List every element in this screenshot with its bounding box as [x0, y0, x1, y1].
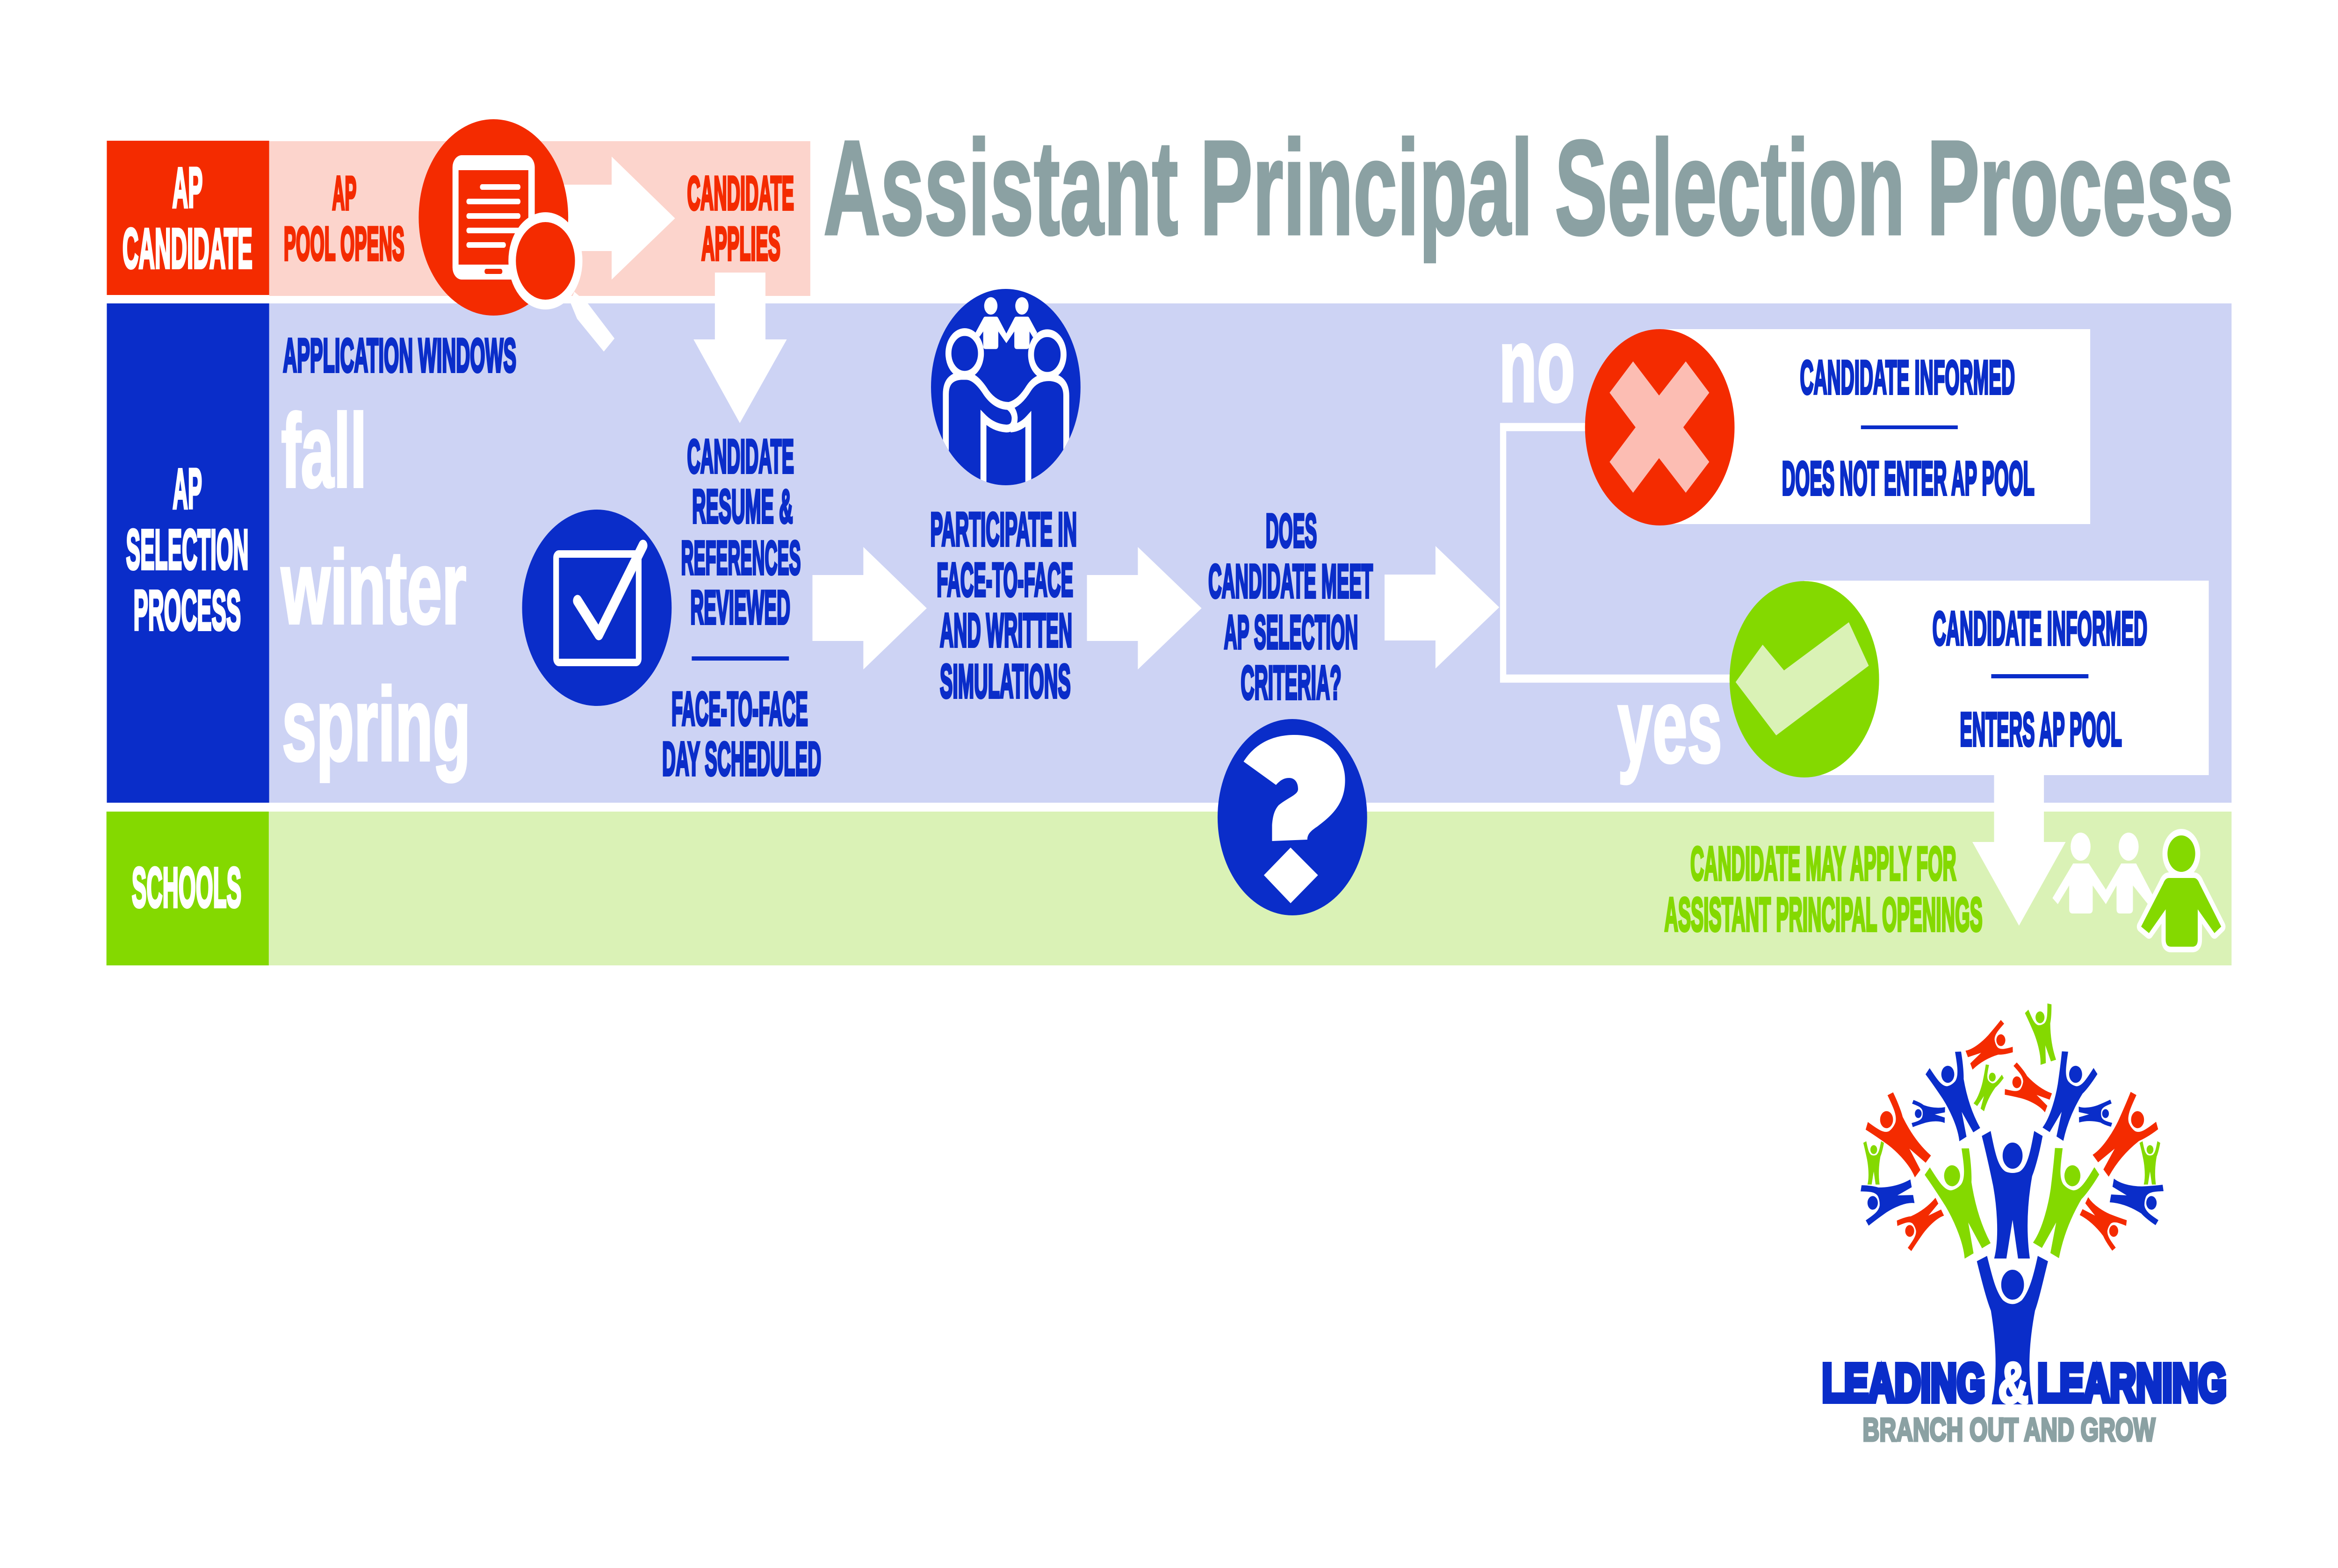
icon: checkbox	[522, 510, 671, 706]
title: Assistant Principal Selection Process	[823, 112, 2234, 263]
text: resume and references reviewed: CANDIDATE	[687, 431, 794, 483]
text: no: no	[1499, 307, 1575, 424]
text: AP pool opens: POOL OPENS	[284, 218, 404, 270]
text: candidate applies: CANDIDATE	[687, 167, 794, 220]
text: participate in simulations: PARTICIPATE IN	[930, 503, 1077, 556]
panel: AP candidate band	[107, 141, 810, 296]
label: schools: SCHOOLS	[132, 856, 241, 919]
text: participate in simulations: SIMULATIONS	[940, 655, 1071, 708]
text: fall winter spring: fall	[281, 393, 367, 509]
arrow: simulations to criteria	[1087, 547, 1202, 669]
text: application windows: APPLICATION WINDOWS	[283, 330, 516, 382]
arrow: criteria to decision	[1385, 546, 1499, 669]
text: does candidate meet criteria: DOES	[1266, 505, 1317, 557]
label: AP selection process: PROCESS	[134, 579, 241, 642]
text: resume and references reviewed: REVIEWED	[690, 581, 790, 634]
arrow: enters pool down to schools	[1972, 771, 2066, 926]
text: does candidate meet criteria	[1208, 505, 1373, 709]
callout: does not enter AP pool	[1585, 329, 2090, 525]
text: fall winter spring	[281, 393, 470, 782]
label: AP candidate	[123, 157, 253, 280]
logo tree of people	[1860, 1003, 2164, 1403]
icon: three people	[2052, 832, 2221, 947]
logo wordmark: &	[1998, 1351, 2028, 1416]
decision bracket	[1503, 427, 1734, 679]
text: candidate may apply: CANDIDATE MAY APPLY FOR	[1690, 837, 1956, 890]
text: candidate may apply	[1664, 837, 1983, 941]
logo wordmark	[1822, 1351, 2227, 1416]
text: resume and references reviewed: DAY SCHEDULED	[662, 733, 821, 785]
text: candidate may apply: ASSISTANT PRINCIPAL OPENINGS	[1664, 888, 1983, 941]
text: candidate applies	[687, 167, 794, 270]
arrow: review to simulations	[812, 547, 927, 669]
label: AP candidate: CANDIDATE	[123, 217, 253, 280]
callout: enters AP pool: CANDIDATE INFORMED	[1933, 602, 2147, 655]
arrow: candidate applies down to review	[693, 273, 787, 423]
text: yes: yes	[1618, 667, 1722, 785]
text: resume and references reviewed	[662, 431, 821, 785]
text: candidate applies: APPLIES	[701, 218, 780, 270]
text: AP pool opens: AP	[332, 167, 356, 220]
logo tagline: BRANCH OUT AND GROW	[1863, 1411, 2156, 1448]
text: participate in simulations: AND WRITTEN	[940, 604, 1072, 657]
text: does candidate meet criteria: AP SELECTION	[1224, 606, 1358, 659]
callout: enters AP pool: ENTERS AP POOL	[1960, 704, 2122, 756]
logo wordmark: LEARNING	[2037, 1353, 2227, 1412]
text: resume and references reviewed: RESUME &	[692, 481, 793, 533]
text: does candidate meet criteria: CRITERIA?	[1241, 656, 1342, 709]
arrow: pool opens to candidate applies	[563, 157, 675, 280]
callout: enters AP pool	[1730, 581, 2209, 777]
text: fall winter spring: winter	[281, 529, 466, 645]
text: fall winter spring: spring	[282, 666, 470, 782]
logo wordmark: LEADING	[1822, 1353, 1985, 1412]
callout: does not enter AP pool: CANDIDATE INFORMED	[1800, 351, 2015, 404]
label: AP candidate: AP	[173, 157, 202, 219]
icon: handshake group	[931, 289, 1081, 486]
text: participate in simulations	[930, 503, 1077, 708]
label: AP selection process	[126, 457, 249, 642]
icon: question mark	[1218, 719, 1367, 915]
icon: tablet with magnifier	[419, 119, 614, 352]
text: AP pool opens	[284, 167, 404, 270]
text: resume and references reviewed: FACE-TO-FACE	[671, 683, 808, 735]
text: participate in simulations: FACE-TO-FACE	[937, 554, 1073, 606]
label: AP selection process: SELECTION	[126, 518, 249, 581]
logo: Leading and Learning	[1822, 1003, 2227, 1448]
callout: does not enter AP pool: DOES NOT ENTER AP POOL	[1782, 453, 2035, 505]
panel: AP selection process band	[107, 303, 2231, 803]
text: resume and references reviewed: REFERENCES	[681, 532, 801, 585]
label: AP selection process: AP	[173, 457, 202, 521]
text: does candidate meet criteria: CANDIDATE MEET	[1208, 555, 1373, 608]
panel: schools band	[107, 812, 2231, 965]
